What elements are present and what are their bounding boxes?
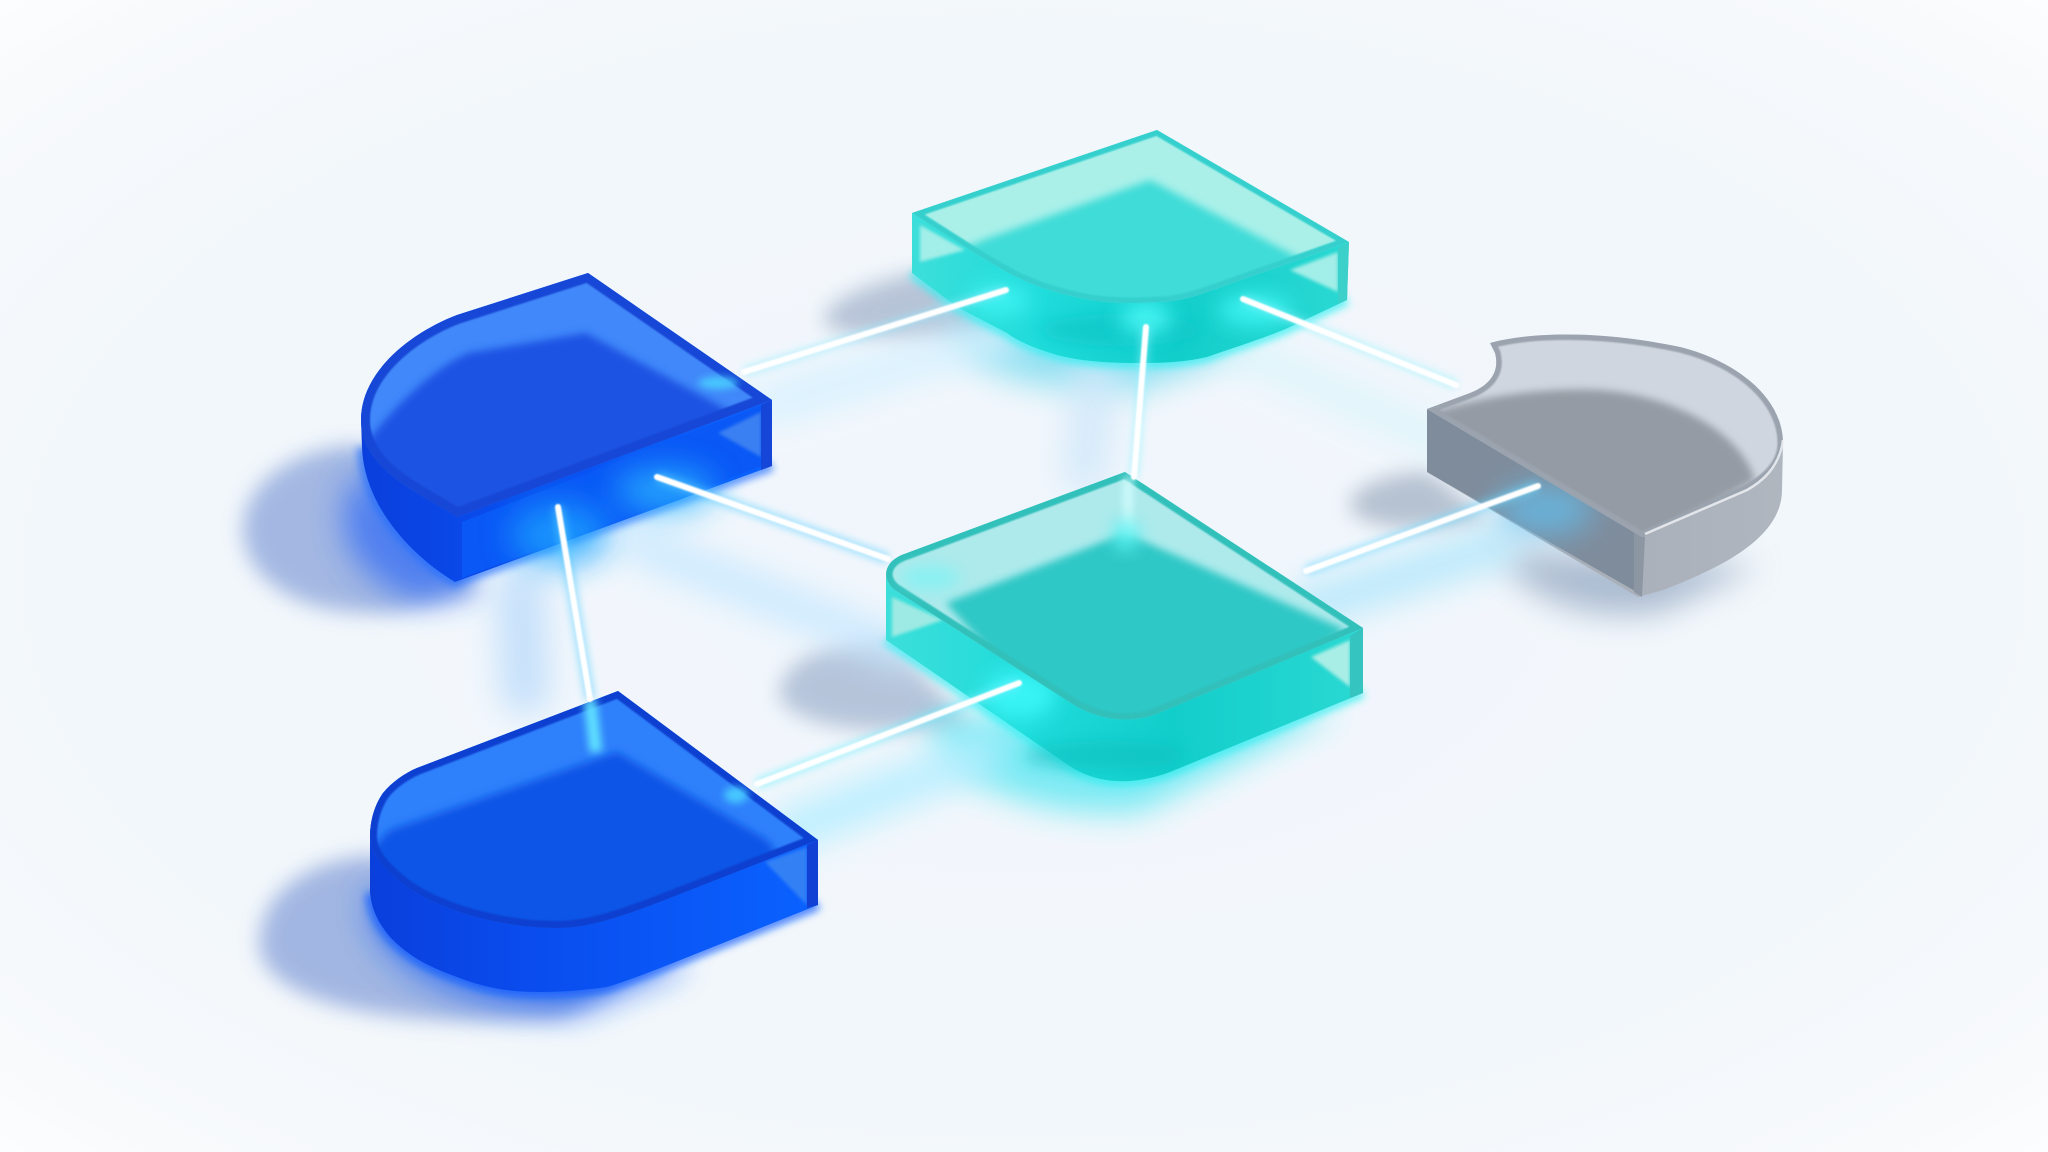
connector: blue upper to teal top [744,290,1006,372]
block: teal top [912,130,1349,363]
block: grey right [1420,334,1783,597]
block: blue upper left [340,273,772,582]
connector: teal top to grey [1243,299,1456,385]
ground light reflections [520,335,1500,830]
connector: blue upper to teal centre [657,477,888,559]
connector: blue lower to teal centre [757,683,1019,784]
block: teal centre [886,472,1363,781]
connector: teal centre to grey [1306,486,1538,571]
connector: teal top to teal centre [1134,327,1146,477]
ground shadows [243,270,1760,1021]
connector: blue upper to blue lower [558,507,590,699]
block: blue lower left [360,691,818,992]
